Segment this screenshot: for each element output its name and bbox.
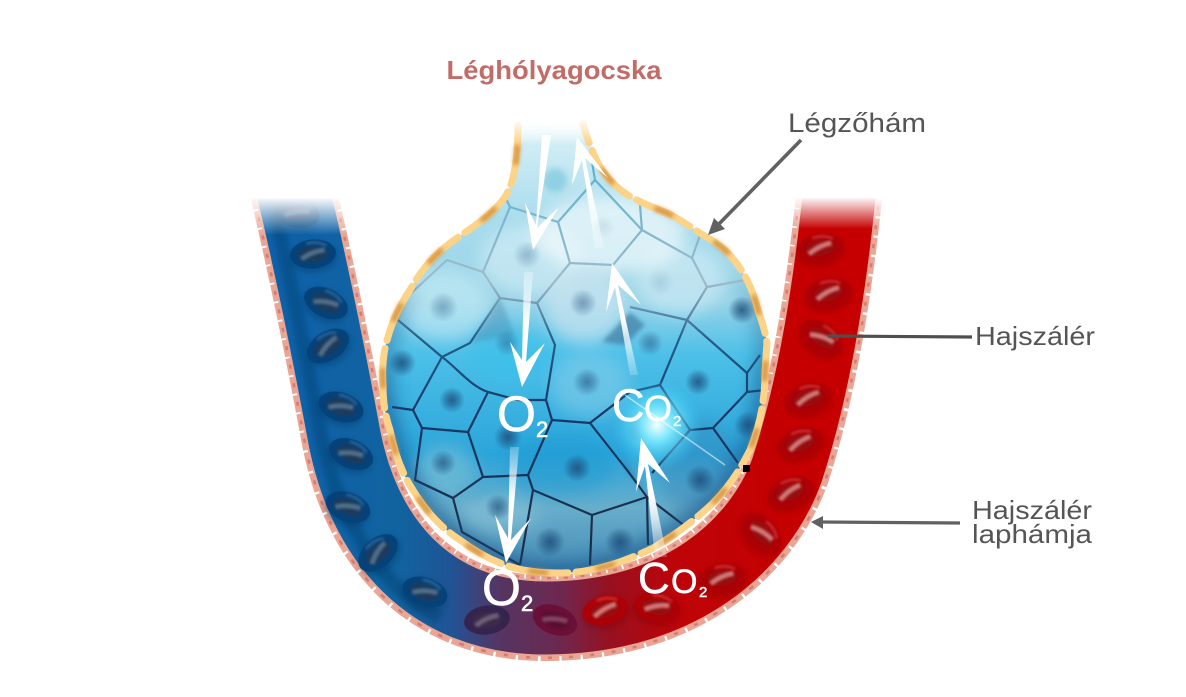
arrow: pointer to capillary endothelium <box>811 516 960 529</box>
arrow: pointer to epithelium <box>708 140 801 235</box>
inner shadow along lower rim <box>383 280 767 573</box>
cell nuclei <box>388 168 762 557</box>
label: O2 in alveolus: O <box>497 386 536 442</box>
label: CO2 in capillary: C <box>638 554 670 603</box>
arrow: carbon dioxide leaving the capillary <box>636 438 670 557</box>
epithelial membrane <box>383 123 767 573</box>
label: CO2 in capillary: O <box>671 563 697 601</box>
label: CO2 in alveolus <box>612 380 681 431</box>
soft cell bodies <box>400 197 740 533</box>
label: CO2 in alveolus: O <box>644 388 672 429</box>
label: CO2 in alveolus: 2 <box>673 413 681 430</box>
label: epithelium: Légzőhám <box>788 108 926 138</box>
title: Léghólyagocska <box>446 55 662 85</box>
label: O2 in alveolus: 2 <box>536 417 548 442</box>
label: CO2 in alveolus: C <box>612 380 644 431</box>
label: capillary endothelium: laphámja <box>972 519 1093 549</box>
arrow: pointer to capillary <box>828 336 972 337</box>
small black mark on membrane <box>743 465 750 472</box>
alveolus <box>370 115 780 590</box>
label: O2 in capillary: O <box>482 560 521 616</box>
capillary vessel <box>230 120 895 641</box>
arrow: oxygen entering the capillary <box>495 447 531 563</box>
red blood cells: mixing section <box>462 599 582 641</box>
red blood cells: arterial side <box>578 230 855 634</box>
light flare <box>618 381 726 466</box>
arrow: carbon dioxide leaving through airway <box>572 137 608 248</box>
arrow: oxygen entering from airway <box>525 135 559 250</box>
cell boundaries <box>392 150 765 565</box>
arrow: carbon dioxide rising in the alveolus <box>606 263 641 375</box>
dark gaps between cells <box>470 298 648 497</box>
arrow: oxygen moving across the alveolus <box>510 272 545 387</box>
red blood cells: venous side <box>271 195 452 617</box>
label: CO2 in capillary: 2 <box>699 584 707 601</box>
label: capillary: Hajszálér <box>975 321 1095 351</box>
label: O2 in capillary: 2 <box>521 591 533 616</box>
label: CO2 in capillary <box>638 554 707 603</box>
label: capillary endothelium: Hajszálér <box>972 495 1092 525</box>
